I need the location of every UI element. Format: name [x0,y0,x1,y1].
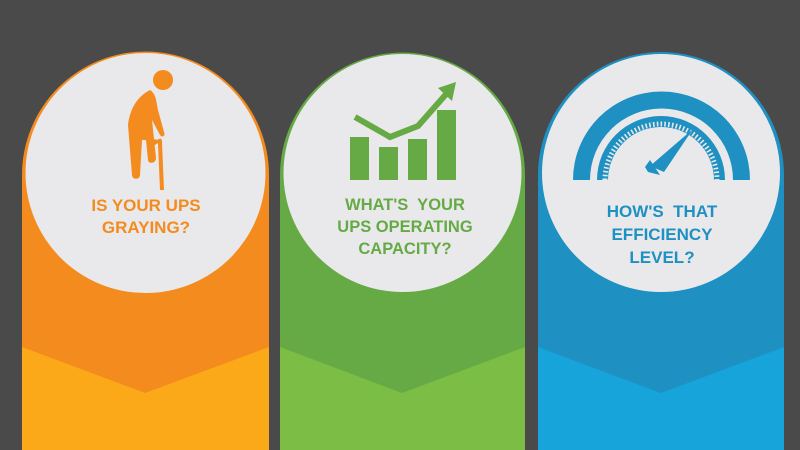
icon: old man with cane [128,70,173,190]
heading: green [337,196,473,258]
panel: orange graying [22,52,269,450]
heading: blue: LEVEL? [629,248,695,267]
chevron: blue lower [538,347,784,450]
panel: blue efficiency [538,52,784,450]
chevron: orange lower [22,347,269,450]
heading: orange: GRAYING? [102,218,190,237]
heading: green: CAPACITY? [358,240,452,258]
icon: bar chart with rising arrow [350,82,456,180]
panel: green capacity [280,52,525,450]
heading: blue: HOW'S THAT [607,202,718,221]
heading: orange: IS YOUR UPS [91,196,201,215]
heading: green: UPS OPERATING [337,218,473,236]
chevron: green lower [280,347,525,450]
heading: blue: EFFICIENCY [611,225,713,244]
heading: green: WHAT'S YOUR [345,196,465,214]
icon: speedometer gauge [573,91,750,180]
heading: orange [91,196,201,237]
heading: blue [607,202,718,267]
